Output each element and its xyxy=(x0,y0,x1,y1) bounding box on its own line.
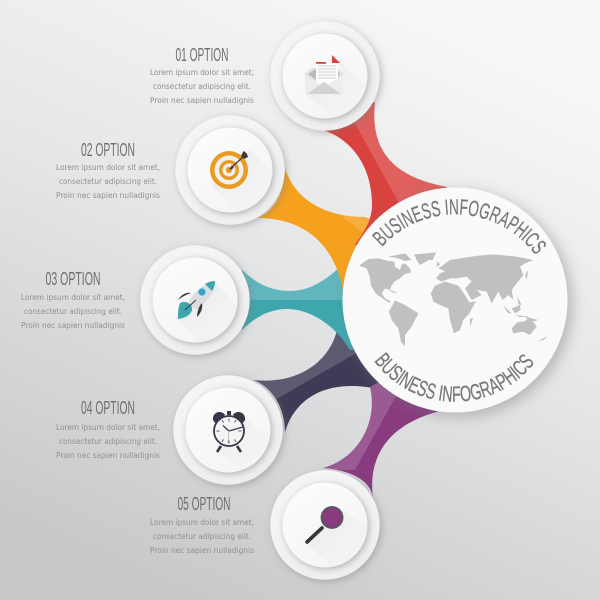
text block: option 03: consectetur adipiscing elit. xyxy=(24,307,122,316)
node 4: alarm clock xyxy=(173,375,283,485)
text block: option 04: 04 OPTION xyxy=(81,398,135,418)
text block: option 03 xyxy=(21,269,125,330)
text block: option 04 xyxy=(56,398,160,460)
text block: option 02: Lorem ipsum dolor sit amet, xyxy=(56,163,160,172)
node 5: magnifier xyxy=(270,470,380,580)
icon: alarm clock xyxy=(213,411,245,452)
connector: red xyxy=(324,102,447,245)
heading: curved top: BUSINESS INFOGRAPHICS xyxy=(372,199,546,254)
text block: option 04: Proin nec sapien nulladignis xyxy=(56,451,160,460)
connector: dark xyxy=(253,332,378,433)
text block: option 02: consectetur adipiscing elit. xyxy=(59,177,157,186)
connector: orange xyxy=(257,167,370,290)
map: old world xyxy=(430,252,548,342)
text block: option 01: Proin nec sapien nulladignis xyxy=(150,96,254,105)
icon: magnifier xyxy=(307,507,342,542)
connector: purple xyxy=(323,382,439,496)
text block: option 02 xyxy=(56,140,160,200)
text block: option 02: Proin nec sapien nulladignis xyxy=(56,191,160,200)
connector: teal xyxy=(242,269,400,350)
text block: option 03: Proin nec sapien nulladignis xyxy=(21,321,125,330)
text block: option 04: Lorem ipsum dolor sit amet, xyxy=(56,423,160,432)
panel: main circle xyxy=(342,184,580,422)
icon: target xyxy=(210,151,248,189)
text block: option 05 xyxy=(150,494,254,555)
node 1: envelope xyxy=(270,21,380,131)
text block: option 03: Lorem ipsum dolor sit amet, xyxy=(21,293,125,302)
text block: option 01: consectetur adipiscing elit. xyxy=(153,82,251,91)
text block: option 02: 02 OPTION xyxy=(81,140,135,160)
text block: option 05: 05 OPTION xyxy=(178,494,230,514)
icon: rocket xyxy=(178,281,215,319)
map: americas xyxy=(359,252,437,347)
heading: curved bottom: BUSINESS INFOGRAPHICS xyxy=(374,352,534,402)
node 2: target xyxy=(175,115,285,225)
icon: envelope xyxy=(305,55,343,94)
text block: option 04: consectetur adipiscing elit. xyxy=(59,437,157,446)
text block: option 05: consectetur adipiscing elit. xyxy=(153,532,251,541)
text block: option 01 xyxy=(150,45,254,105)
text block: option 01: Lorem ipsum dolor sit amet, xyxy=(150,68,254,77)
text block: option 03: 03 OPTION xyxy=(46,269,100,289)
text block: option 05: Lorem ipsum dolor sit amet, xyxy=(150,518,254,527)
node 3: rocket xyxy=(140,245,250,355)
text block: option 01: 01 OPTION xyxy=(176,45,228,65)
text block: option 05: Proin nec sapien nulladignis xyxy=(150,546,254,555)
